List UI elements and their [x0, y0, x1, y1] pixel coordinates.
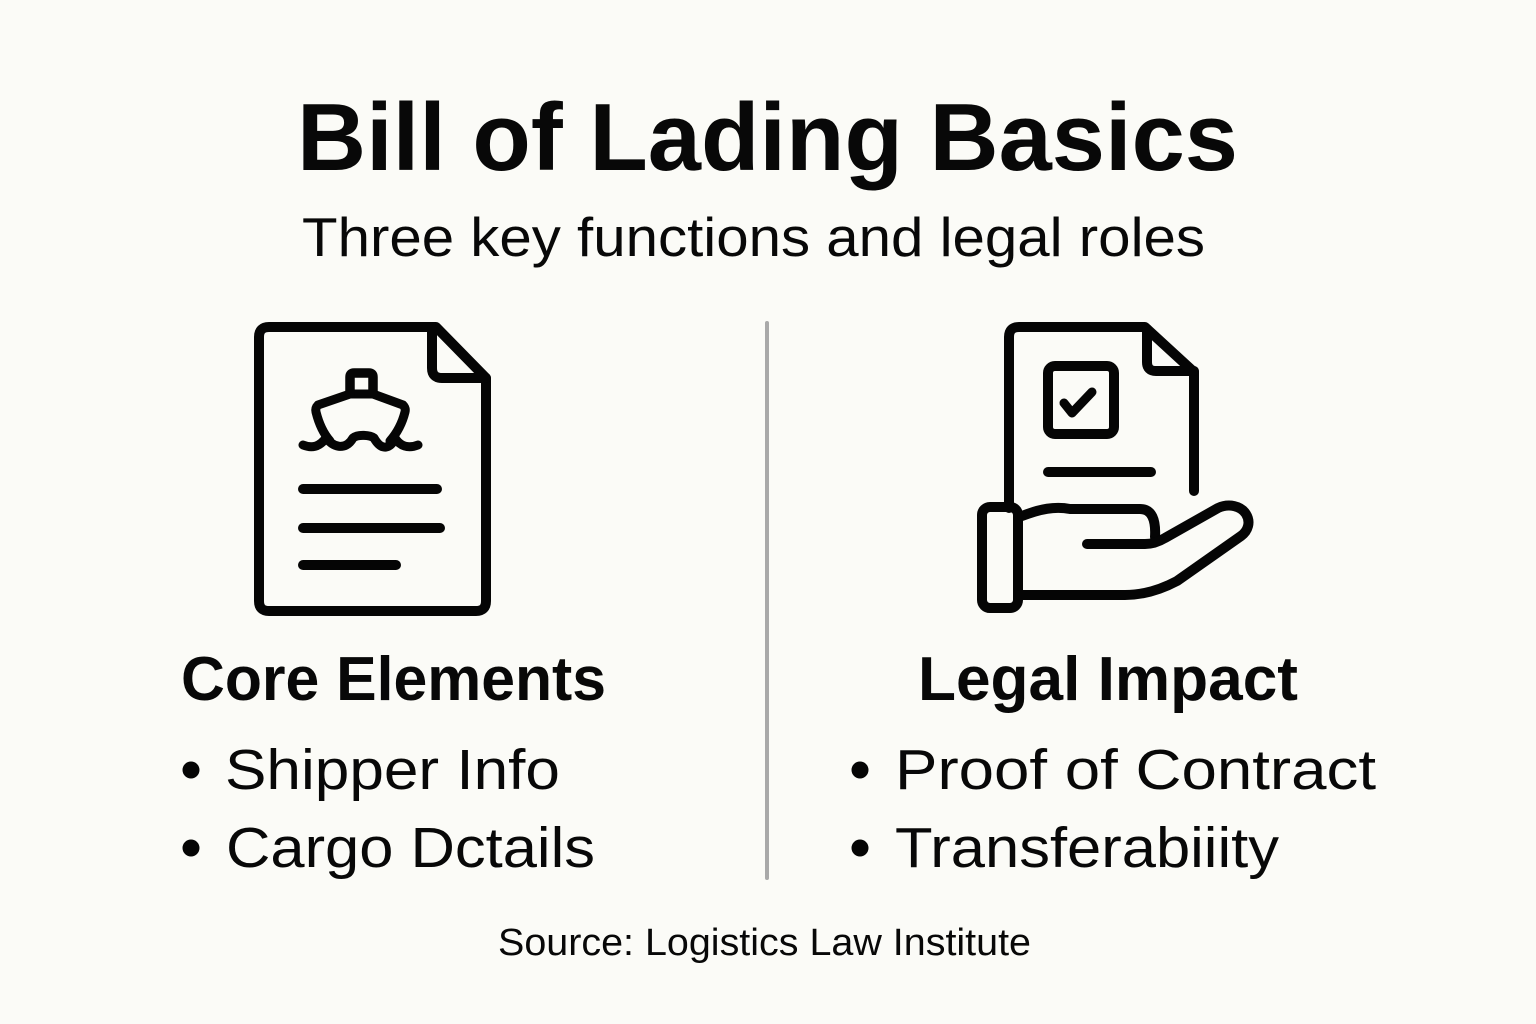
heading: core elements: Core Elements	[181, 645, 606, 714]
bullet list: legal impact: Transferabiiity	[895, 816, 1280, 880]
title: Bill of Lading Basics	[297, 84, 1238, 191]
subtitle: Three key functions and legal roles	[302, 206, 1205, 268]
panel: core elements	[181, 327, 606, 880]
bullet list: core elements: Shipper Info	[225, 738, 560, 802]
bullet list: core elements: Cargo Dctails	[226, 816, 595, 880]
source note: Source: Logistics Law Institute	[498, 922, 1031, 964]
bullet list: legal impact	[852, 738, 1376, 880]
bullet list: core elements	[182, 738, 595, 880]
heading: legal impact: Legal Impact	[918, 645, 1298, 714]
icon: shipping document	[259, 327, 486, 611]
panel: legal impact	[852, 327, 1376, 880]
bullet list: legal impact: Proof of Contract	[895, 738, 1376, 802]
icon: document held in hand	[982, 327, 1248, 608]
